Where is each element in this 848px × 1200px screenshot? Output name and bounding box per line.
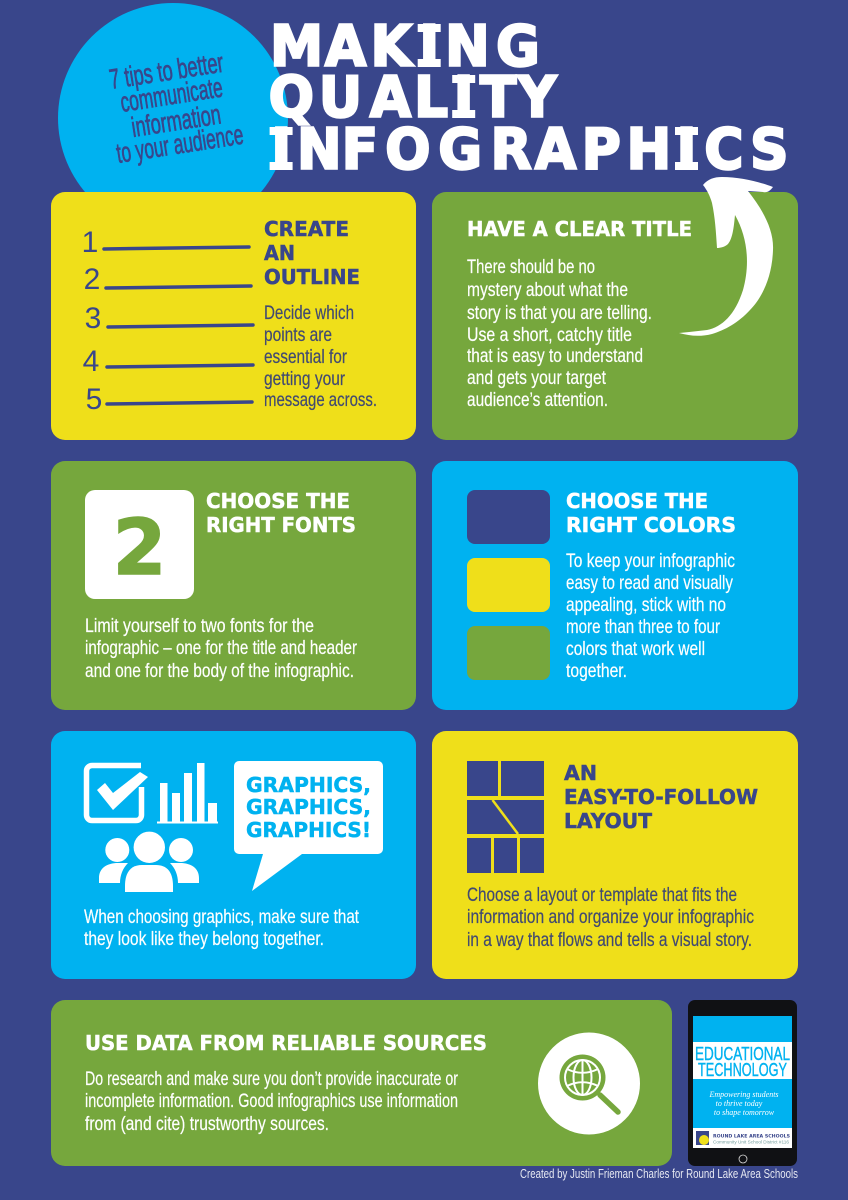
heading: right fonts: CHOOSE THE [206, 489, 350, 513]
icon: numbered outline list: 2 [84, 263, 100, 296]
icon: layout grid [467, 761, 544, 873]
icon: number two tile: 2 [113, 504, 166, 593]
title [269, 13, 788, 182]
panel: choose the right fonts [51, 461, 416, 710]
title: INFOGRAPHICS [271, 116, 788, 182]
text: graphics body [84, 906, 359, 950]
icon: numbered outline list: 3 [85, 302, 101, 335]
tablet: educational technology: ROUND LAKE AREA SCHOOLS [713, 1134, 790, 1140]
icon: number two tile [85, 490, 194, 599]
subtitle circle: to your audience [114, 119, 245, 169]
tablet: educational technology: to shape tomorrow [714, 1108, 775, 1117]
text: fonts body: and one for the body of the infographic. [85, 660, 354, 682]
text: outline body: message across. [264, 389, 377, 411]
heading: layout: AN [564, 761, 597, 785]
callout: speech bubble: GRAPHICS! [246, 818, 371, 842]
heading: reliable sources: USE DATA FROM RELIABLE SOURCES [85, 1031, 487, 1055]
heading: create an outline: CREATE [264, 217, 349, 241]
tablet: educational technology: EDUCATIONAL [695, 1044, 790, 1064]
text: layout body: information and organize your infographic [467, 906, 754, 928]
text: colors body: together. [566, 660, 627, 682]
text: outline body: getting your [264, 368, 345, 390]
text: sources body [85, 1068, 458, 1135]
text: graphics body: When choosing graphics, make sure that [84, 906, 359, 928]
icon: numbered outline list: 5 [86, 383, 102, 416]
heading: layout [564, 761, 758, 833]
text: clear title body [467, 256, 652, 411]
icon: colour swatches [467, 490, 550, 680]
heading: right colors: RIGHT COLORS [566, 513, 736, 537]
callout: speech bubble: GRAPHICS, [246, 773, 371, 797]
heading: right fonts [206, 489, 356, 537]
text: outline body: points are [264, 324, 332, 346]
tablet: educational technology: to thrive today [716, 1099, 763, 1108]
heading: layout: EASY-TO-FOLLOW [564, 785, 758, 809]
text: clear title body: There should be no [467, 256, 595, 278]
icon: numbered outline list: 1 [82, 226, 98, 259]
title: MAKING [270, 13, 540, 79]
text: outline body: essential for [264, 346, 347, 368]
text: clear title body: and gets your target [467, 367, 606, 389]
callout: speech bubble [234, 761, 383, 891]
text: graphics body: they look like they belong together. [84, 928, 324, 950]
arrow: pointing to title [679, 177, 773, 336]
icon: magnifying glass over globe [538, 1032, 640, 1134]
text: colors body [566, 550, 735, 682]
text: colors body: easy to read and visually [566, 572, 733, 594]
text: clear title body: story is that you are telling. [467, 302, 652, 324]
text: layout body: in a way that flows and tells a visual story. [467, 929, 752, 951]
subtitle circle [58, 3, 288, 233]
icon: bar chart [157, 763, 218, 824]
panel: have a clear title [432, 192, 798, 440]
heading: right colors: CHOOSE THE [566, 489, 708, 513]
heading: create an outline [264, 217, 360, 289]
text: fonts body [85, 615, 357, 682]
text: sources body: Do research and make sure you don’t provide inaccurate or [85, 1068, 458, 1090]
panel: easy-to-follow layout [432, 731, 798, 979]
text: clear title body: that is easy to understand [467, 345, 643, 367]
title: QUALITY [269, 64, 558, 130]
heading: right colors [566, 489, 736, 537]
tablet: educational technology: TECHNOLOGY [698, 1060, 787, 1080]
panel: graphics [51, 731, 416, 979]
text: colors body: colors that work well [566, 638, 705, 660]
text: fonts body: Limit yourself to two fonts for the [85, 615, 314, 637]
callout: speech bubble: GRAPHICS, [246, 795, 371, 819]
text: layout body: Choose a layout or template that fits the [467, 884, 737, 906]
heading: create an outline: AN [264, 241, 295, 265]
text: sources body: incomplete information. Good infographics use information [85, 1090, 458, 1112]
text: clear title body: audience’s attention. [467, 389, 608, 411]
text: colors body: To keep your infographic [566, 550, 735, 572]
panel: create an outline [51, 192, 416, 440]
heading: create an outline: OUTLINE [264, 265, 360, 289]
panel: choose the right colors [432, 461, 798, 710]
subtitle circle: communicate [118, 72, 225, 118]
text: outline body: Decide which [264, 302, 354, 324]
text: clear title body: mystery about what the [467, 279, 628, 301]
text: outline body [264, 302, 377, 411]
text: colors body: appealing, stick with no [566, 594, 726, 616]
tablet: educational technology: Community Unit School District #116 [713, 1140, 790, 1144]
heading: have a clear title: HAVE A CLEAR TITLE [467, 217, 692, 241]
subtitle circle: 7 tips to better [107, 47, 226, 95]
heading: layout: LAYOUT [564, 809, 652, 833]
icon: numbered outline list: 4 [83, 345, 99, 378]
icon: checkbox [86, 766, 148, 820]
text: colors body: more than three to four [566, 616, 720, 638]
heading: right fonts: RIGHT FONTS [206, 513, 356, 537]
text: fonts body: infographic – one for the title and header [85, 637, 357, 659]
panel: reliable sources [51, 1000, 672, 1166]
text: clear title body: Use a short, catchy title [467, 324, 632, 346]
text: layout body [467, 884, 754, 951]
tablet: educational technology [688, 1000, 797, 1166]
text: sources body: from (and cite) trustworthy sources. [85, 1113, 329, 1135]
tablet: educational technology: Empowering students [708, 1090, 779, 1099]
icon: people [99, 832, 199, 892]
icon: numbered outline list [82, 226, 253, 416]
subtitle circle: information [129, 99, 223, 143]
